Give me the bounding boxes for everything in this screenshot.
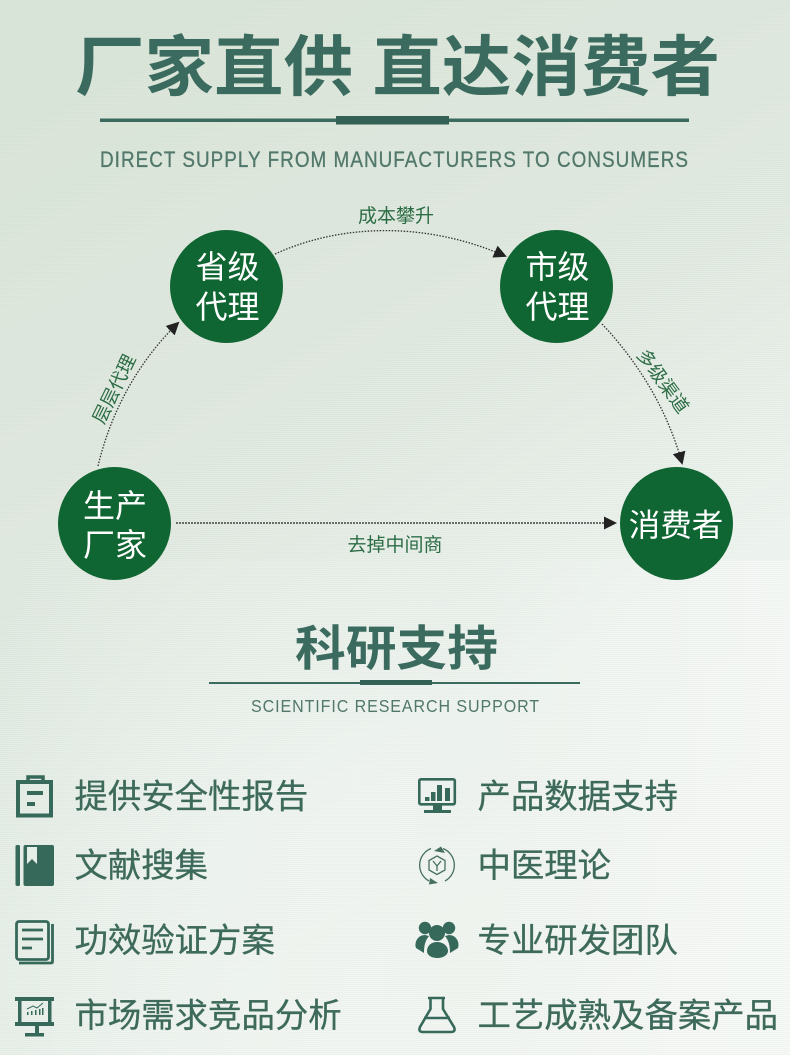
section divider xyxy=(209,680,580,685)
text: 功效验证方案: 功效验证方案 xyxy=(74,923,275,960)
node: 消费者 xyxy=(620,467,733,580)
support list xyxy=(15,777,778,1036)
node: 市级代理: 市级 xyxy=(525,249,590,285)
label: 层层代理: 层层代理 xyxy=(88,351,140,427)
node: 生产厂家 xyxy=(58,467,171,580)
icon: team of people xyxy=(415,922,459,958)
icon: presentation screen xyxy=(15,997,54,1036)
node: 生产厂家: 生产 xyxy=(83,488,147,524)
node: 省级代理 xyxy=(170,230,283,343)
node: 生产厂家: 厂家 xyxy=(83,527,147,563)
arrow: provincial to city agent xyxy=(275,231,505,256)
flow diagram xyxy=(58,205,733,580)
arrow: factory to provincial agent xyxy=(98,323,178,466)
arrow: city agent to consumer xyxy=(602,324,682,463)
node: 市级代理: 代理 xyxy=(525,289,590,325)
title: 厂家直供 直达消费者 xyxy=(75,30,720,104)
node: 省级代理: 省级 xyxy=(195,249,260,285)
subtitle: DIRECT SUPPLY FROM MANUFACTURERS TO CONSUMERS xyxy=(100,147,689,172)
text: 市场需求竞品分析: 市场需求竞品分析 xyxy=(74,998,342,1035)
text: 工艺成熟及备案产品: 工艺成熟及备案产品 xyxy=(478,998,778,1035)
icon: cycle with cube xyxy=(420,846,454,884)
text: 文献搜集: 文献搜集 xyxy=(74,848,208,885)
label: 多级渠道: 多级渠道 xyxy=(633,345,693,417)
title divider xyxy=(100,116,689,124)
icon: document stack xyxy=(16,922,52,963)
section heading: 科研支持 xyxy=(295,623,498,676)
icon: flask xyxy=(419,998,455,1032)
node: 省级代理: 代理 xyxy=(195,289,260,325)
icon: data monitor xyxy=(419,779,455,813)
node: 市级代理 xyxy=(500,230,613,343)
text: 提供安全性报告: 提供安全性报告 xyxy=(74,779,308,816)
section subtitle: SCIENTIFIC RESEARCH SUPPORT xyxy=(251,696,540,716)
icon: clipboard report xyxy=(18,777,51,816)
icon: bookmark book xyxy=(16,845,54,886)
text: 专业研发团队: 专业研发团队 xyxy=(478,923,678,960)
node: 消费者: 消费者 xyxy=(629,507,723,543)
arrow: factory direct to consumer xyxy=(176,522,615,524)
label: 去掉中间商: 去掉中间商 xyxy=(347,534,443,556)
text: 产品数据支持: 产品数据支持 xyxy=(478,779,678,816)
label: 成本攀升: 成本攀升 xyxy=(358,205,434,227)
text: 中医理论: 中医理论 xyxy=(478,848,611,885)
